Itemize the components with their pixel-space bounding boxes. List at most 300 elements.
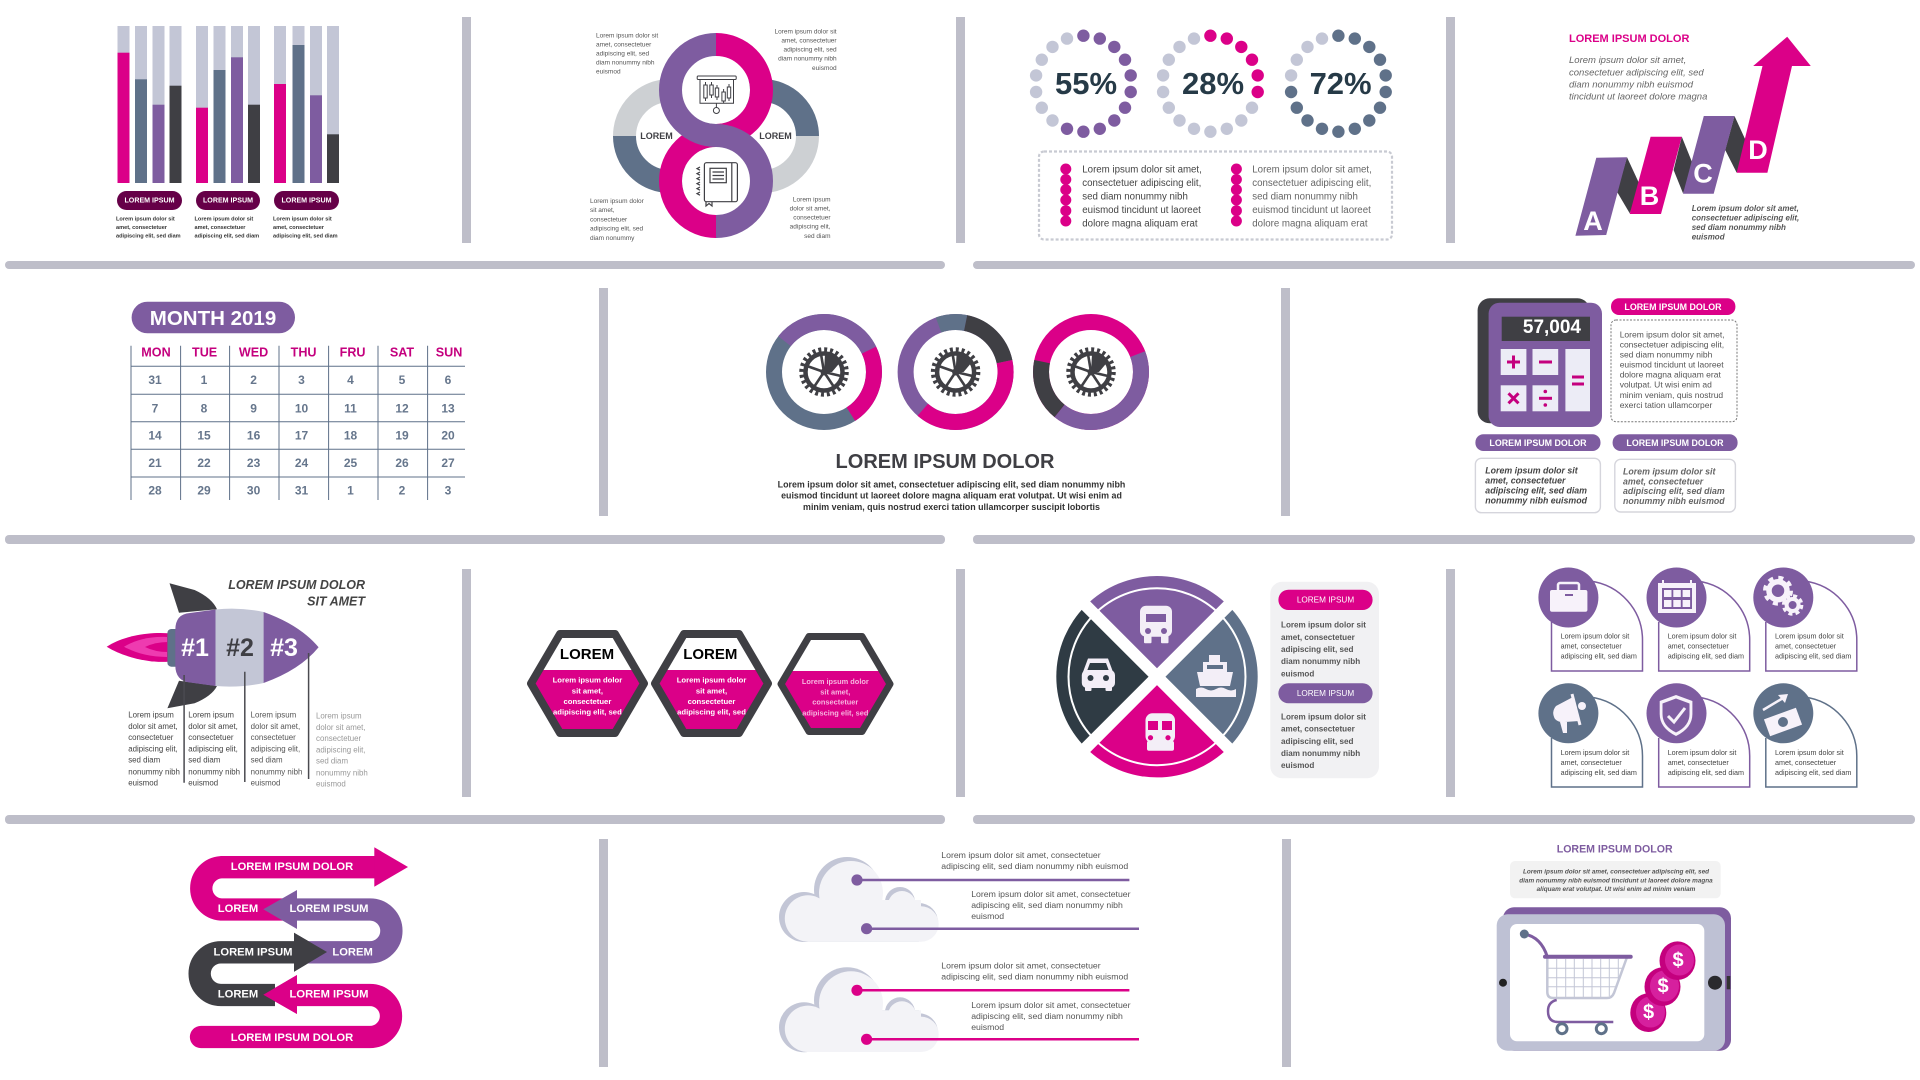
- column text 2: consectetuer: [188, 732, 234, 742]
- pointer 2: [861, 923, 1139, 934]
- column text 2: Lorem ipsum: [188, 710, 234, 719]
- label top: LOREM IPSUM DOLOR: [231, 861, 353, 873]
- arrow: dark: [200, 933, 327, 995]
- month pill: MONTH 2019: [150, 307, 276, 330]
- note box right: [1615, 459, 1735, 512]
- text column 2: Lorem ipsum dolor sit amet,: [1252, 164, 1372, 175]
- calendar dates: 25: [344, 456, 357, 470]
- weekday headers: MON: [141, 346, 171, 360]
- calendar dates: 12: [395, 402, 409, 416]
- rocket bottom fin: [167, 681, 217, 708]
- card megaphone: adipiscing elit, sed diam: [1561, 768, 1637, 776]
- label purple: LOREM IPSUM: [290, 903, 368, 915]
- body text: minim veniam, quis nostrud exerci tation ullamcorper suscipit lobortis: [803, 502, 1100, 512]
- icon: cloud 2: [779, 967, 939, 1052]
- text: bottom right: consectetuer: [793, 214, 831, 221]
- dashed text box: [1611, 320, 1737, 422]
- bar caption 2: Lorem ipsum dolor sit: [194, 217, 253, 223]
- pill heading magenta: LOREM IPSUM DOLOR: [1624, 302, 1722, 312]
- text: bottom left: Lorem ipsum dolor: [590, 198, 645, 204]
- bar caption 1: amet, consectetuer: [116, 225, 168, 231]
- note box right: amet, consectetuer: [1623, 476, 1704, 486]
- label short 2: LOREM: [332, 946, 373, 958]
- note box left: [1475, 458, 1600, 513]
- text: bottom right: adipiscing elit,: [790, 223, 831, 230]
- text block 4: adipiscing elit, sed diam nonummy nibh: [971, 1011, 1123, 1021]
- calendar dates: 4: [347, 373, 354, 387]
- panel: bar charts: [116, 26, 339, 239]
- card megaphone: [1538, 683, 1642, 787]
- legend pill 2: LOREM IPSUM: [1297, 689, 1354, 698]
- calendar dates: 13: [441, 402, 455, 416]
- legend text 1: diam nonummy nibh: [1281, 656, 1360, 666]
- legend text 2: diam nonummy nibh: [1281, 748, 1360, 758]
- calendar dates: 7: [152, 402, 159, 416]
- hexagon 3: Lorem ipsum dolor: [802, 676, 869, 686]
- column text 2: dolor sit amet,: [188, 722, 238, 730]
- panel: hexagons: [531, 634, 890, 733]
- rocket section 1: [175, 610, 216, 686]
- label dark: LOREM IPSUM: [214, 946, 292, 958]
- calendar dates: 16: [247, 429, 261, 443]
- card gears: adipiscing elit, sed diam: [1775, 651, 1851, 660]
- column text 2: nonummy nibh: [188, 767, 240, 776]
- letter C: C: [1693, 158, 1713, 188]
- hexagon 1: sit amet,: [572, 686, 603, 695]
- letter B: B: [1640, 181, 1659, 211]
- intro text: tincidunt ut laoreet dolore magna: [1569, 91, 1707, 102]
- bar label pill 3: [274, 191, 339, 210]
- column text 3: consectetuer: [251, 732, 296, 742]
- text: bottom left: adipiscing elit, sed: [590, 225, 643, 232]
- weekday headers: SUN: [436, 346, 462, 360]
- panel: dotted percentage rings: [1030, 29, 1392, 239]
- heading: LOREM IPSUM DOLOR: [228, 578, 365, 592]
- calendar dates: 2: [250, 373, 257, 387]
- label magenta: LOREM IPSUM: [290, 989, 368, 1001]
- calendar dates: 19: [395, 429, 409, 443]
- card calendar: [1646, 568, 1750, 671]
- bar label pill 2: [196, 191, 260, 210]
- card briefcase: [1538, 568, 1642, 671]
- dot ring 28 percent: [1157, 29, 1264, 138]
- hexagon 1: consectetuer: [563, 696, 611, 706]
- arrow: magenta top: [201, 847, 408, 910]
- note box left: Lorem ipsum dolor sit: [1485, 465, 1579, 475]
- icon: cloud 1: [779, 857, 939, 942]
- hexagon 3: adipiscing elit, sed: [802, 708, 869, 717]
- column text 1: nonummy nibh: [128, 767, 180, 776]
- calculator body: [1478, 298, 1602, 427]
- label #2: #2: [226, 634, 254, 662]
- pill heading magenta: [1611, 298, 1735, 315]
- icon: ship: [1196, 655, 1236, 697]
- calendar dates: 27: [441, 456, 455, 470]
- legend text 1: Lorem ipsum dolor sit: [1281, 620, 1366, 629]
- rocket flame: [107, 633, 168, 662]
- text column 1: sed diam nonummy nibh: [1082, 191, 1188, 202]
- column text 3: euismod: [251, 778, 280, 787]
- legend text 1: euismod: [1281, 669, 1314, 678]
- bar caption 3: adipiscing elit, sed diam: [273, 233, 338, 239]
- box text: dolore magna aliquam erat: [1620, 370, 1721, 380]
- heading: LOREM IPSUM DOLOR: [1569, 33, 1689, 45]
- calendar dates: 24: [295, 456, 308, 470]
- step D arrow: [1737, 37, 1811, 173]
- weekday headers: FRU: [340, 346, 366, 360]
- note box left: adipiscing elit, sed diam: [1485, 486, 1587, 496]
- calendar dates: 23: [247, 456, 261, 470]
- box text: volutpat. Ut wisi enim ad: [1620, 380, 1712, 390]
- card gears: Lorem ipsum dolor sit: [1775, 631, 1844, 640]
- panel: rising ribbon arrow: [1569, 33, 1811, 241]
- pointer 4: [861, 1034, 1139, 1045]
- arrow: magenta lower: [201, 975, 391, 1037]
- donut 2: [906, 322, 1006, 422]
- text column 2: dolore magna aliquam erat: [1252, 218, 1368, 229]
- bar chart group 1: [118, 26, 182, 183]
- bar caption 2: amet, consectetuer: [194, 225, 246, 231]
- text: bottom right: Lorem ipsum: [793, 196, 830, 203]
- dot ring 55 percent: [1030, 29, 1137, 138]
- legend text 2: Lorem ipsum dolor sit: [1281, 712, 1366, 721]
- card shield: adipiscing elit, sed diam: [1668, 768, 1744, 776]
- arrow: dark head overlay: [294, 933, 327, 972]
- column text 4: sed diam: [316, 756, 348, 765]
- calendar dates: 5: [399, 373, 406, 387]
- weekday headers: THU: [291, 346, 317, 360]
- label #3: #3: [270, 634, 298, 662]
- calendar dates: 3: [445, 483, 452, 497]
- step A: [1575, 157, 1627, 236]
- pie quadrant top: [1086, 576, 1228, 677]
- pie quadrant bottom: [1086, 677, 1228, 777]
- pie inner ring and gaps: [1068, 588, 1246, 765]
- card shield: [1646, 683, 1750, 787]
- card briefcase: amet, consectetuer: [1561, 641, 1622, 650]
- note box left: amet, consectetuer: [1485, 475, 1566, 485]
- column text 3: adipiscing elit,: [251, 744, 300, 753]
- bullet column 1: [1060, 164, 1071, 226]
- step B: [1630, 137, 1682, 214]
- box text: sed diam nonummy nibh: [1620, 349, 1713, 359]
- hexagon 3: [781, 636, 890, 732]
- hexagon 3: consectetuer: [812, 697, 858, 706]
- weekday headers: TUE: [192, 346, 217, 360]
- text: bottom left: sit amet,: [590, 206, 615, 214]
- calendar dates: 8: [201, 402, 208, 416]
- text: top right: adipiscing elit, sed: [783, 46, 837, 53]
- panel: rocket: [107, 578, 368, 788]
- text column 2: consectetuer adipiscing elit,: [1252, 178, 1371, 188]
- column text 3: Lorem ipsum: [251, 710, 297, 719]
- label #1: #1: [181, 634, 209, 662]
- icon: notebook: [697, 163, 737, 206]
- pill heading left: LOREM IPSUM DOLOR: [1489, 438, 1587, 448]
- column text 1: dolor sit amet,: [128, 722, 178, 730]
- step C: [1683, 116, 1734, 194]
- bar caption 1: adipiscing elit, sed diam: [116, 233, 181, 239]
- legend text 1: adipiscing elit, sed: [1281, 644, 1353, 654]
- calendar dates: 14: [148, 429, 162, 443]
- label: right ring: LOREM: [759, 131, 792, 141]
- bar chart group 2: [196, 26, 260, 183]
- hexagon 1: Lorem ipsum dolor: [553, 675, 622, 684]
- weekday headers: SAT: [390, 346, 414, 360]
- body text: Lorem ipsum dolor sit amet, consectetuer adipiscing elit, sed diam nonummy nibh: [778, 479, 1125, 489]
- text: top left: Lorem ipsum dolor sit: [596, 32, 658, 39]
- hexagon 2: LOREM: [683, 646, 737, 663]
- text column 1: Lorem ipsum dolor sit amet,: [1082, 164, 1202, 175]
- dot ring 72 percent: [1285, 29, 1392, 138]
- calculator display value: 57,004: [1523, 317, 1581, 338]
- card megaphone: amet, consectetuer: [1561, 758, 1622, 766]
- label bottom: LOREM IPSUM DOLOR: [231, 1032, 353, 1044]
- icon: coin 3: [1660, 941, 1696, 980]
- pill heading left: [1475, 434, 1600, 451]
- panel: clouds: [779, 850, 1139, 1052]
- label: left ring: LOREM: [640, 131, 673, 141]
- card gears: amet, consectetuer: [1775, 641, 1837, 650]
- intro text: Lorem ipsum dolor sit amet,: [1569, 54, 1686, 66]
- caption text: consectetuer adipiscing elit,: [1692, 213, 1799, 222]
- note box left: nonummy nibh euismod: [1485, 496, 1588, 506]
- rocket section 2: [216, 609, 264, 687]
- column text 4: dolor sit amet,: [316, 722, 366, 732]
- hexagon 2: [655, 634, 768, 733]
- calendar dates: 31: [295, 483, 308, 497]
- text: top left: adipiscing elit, sed: [596, 50, 649, 57]
- column text 1: Lorem ipsum: [128, 710, 174, 719]
- icon: car: [1082, 658, 1115, 691]
- pill heading right: LOREM IPSUM DOLOR: [1626, 438, 1724, 448]
- column text 2: adipiscing elit,: [188, 744, 238, 753]
- caption text: Lorem ipsum dolor sit amet,: [1692, 204, 1799, 212]
- bar label pill 2: LOREM IPSUM: [203, 196, 253, 204]
- column text 1: consectetuer: [128, 732, 174, 742]
- label short 1: LOREM: [218, 903, 258, 915]
- text block 1: adipiscing elit, sed diam nonummy nibh euismod: [941, 861, 1128, 871]
- text: top left: diam nonummy nibh: [596, 59, 655, 66]
- box text: Lorem ipsum dolor sit amet,: [1620, 329, 1725, 339]
- note box right: nonummy nibh euismod: [1623, 496, 1725, 506]
- legend pill 1: LOREM IPSUM: [1297, 596, 1354, 604]
- description box: Lorem ipsum dolor sit amet, consectetuer adipiscing elit, sed: [1523, 868, 1710, 875]
- text block 4: euismod: [971, 1022, 1004, 1032]
- heading: LOREM IPSUM DOLOR: [1557, 843, 1673, 855]
- value 72 percent: 72%: [1310, 66, 1372, 101]
- text block 2: euismod: [971, 911, 1004, 921]
- legend panel background: [1270, 582, 1379, 778]
- text: top right: euismod: [812, 64, 837, 72]
- card shield: amet, consectetuer: [1668, 758, 1729, 766]
- calculator keys: [1501, 349, 1590, 411]
- calendar dates: 28: [148, 483, 162, 497]
- legend text 2: amet, consectetuer: [1281, 724, 1356, 733]
- column text 2: sed diam: [188, 755, 221, 764]
- text column 1: dolore magna aliquam erat: [1082, 218, 1198, 229]
- text: bottom left: consectetuer: [590, 216, 628, 223]
- column text 3: sed diam: [251, 755, 283, 764]
- hexagon 1: [531, 634, 644, 733]
- rocket nozzle: [167, 629, 179, 667]
- card money: Lorem ipsum dolor sit: [1775, 748, 1844, 756]
- heading: SIT AMET: [307, 595, 366, 609]
- card shield: Lorem ipsum dolor sit: [1668, 748, 1736, 756]
- description box: diam nonummy nibh euismod tincidunt ut laoreet dolore magna: [1519, 877, 1713, 884]
- bar caption 2: adipiscing elit, sed diam: [194, 233, 259, 239]
- caption text: sed diam nonummy nibh: [1692, 222, 1786, 232]
- text block 1: Lorem ipsum dolor sit amet, consectetuer: [941, 850, 1101, 860]
- column text 4: Lorem ipsum: [316, 711, 362, 720]
- pie quadrant right: [1157, 606, 1258, 748]
- bar caption 3: Lorem ipsum dolor sit: [273, 217, 332, 223]
- calendar dates: 21: [148, 456, 162, 470]
- card calendar: Lorem ipsum dolor sit: [1668, 631, 1736, 640]
- column text 4: consectetuer: [316, 734, 362, 742]
- intro text: consectetuer adipiscing elit, sed: [1569, 67, 1704, 78]
- ribbon folds: [1617, 116, 1747, 213]
- text: bottom right: sed diam: [804, 232, 830, 240]
- hexagon 2: consectetuer: [688, 696, 735, 706]
- dashed text box: [1039, 152, 1392, 240]
- text: top right: amet, consectetuer: [781, 37, 837, 44]
- calendar grid: [131, 346, 465, 500]
- panel: interlocking rings: [590, 28, 837, 242]
- rocket top fin: [170, 583, 217, 613]
- calendar dates: 6: [445, 373, 452, 387]
- card money: amet, consectetuer: [1775, 758, 1837, 766]
- hexagon 2: adipiscing elit, sed: [677, 707, 746, 716]
- leader lines: [184, 653, 309, 783]
- card calendar: adipiscing elit, sed diam: [1668, 651, 1744, 660]
- value 28 percent: 28%: [1182, 66, 1244, 101]
- text column 1: consectetuer adipiscing elit,: [1082, 178, 1201, 188]
- bar label pill 3: LOREM IPSUM: [281, 196, 332, 204]
- bullet column 2: [1231, 164, 1242, 226]
- text: bottom left: diam nonummy: [590, 234, 635, 242]
- hexagon 2: Lorem ipsum dolor: [677, 675, 746, 684]
- icon: bus: [1140, 606, 1172, 643]
- rocket section 3: [264, 612, 319, 683]
- icon: shopping cart: [1520, 930, 1631, 1034]
- calendar dates: 1: [347, 483, 354, 497]
- weekday headers: WED: [239, 346, 268, 360]
- calendar dates: 18: [344, 429, 357, 443]
- icon: presentation board: [697, 76, 736, 114]
- box text: exerci tation ullamcorper: [1620, 400, 1712, 410]
- column text 4: euismod: [316, 779, 346, 788]
- box text: minim veniam, quis nostrud: [1620, 390, 1723, 400]
- hexagon 1: adipiscing elit, sed: [553, 707, 622, 716]
- pointer 3: [851, 985, 1129, 996]
- card calendar: amet, consectetuer: [1668, 641, 1729, 650]
- text column 2: euismod tincidunt ut laoreet: [1252, 204, 1371, 216]
- intro text: diam nonummy nibh euismod: [1569, 79, 1694, 90]
- caption text: euismod: [1692, 232, 1726, 241]
- hexagon 1: LOREM: [560, 646, 614, 663]
- calendar dates: 29: [197, 483, 211, 497]
- calendar dates: 15: [197, 429, 211, 443]
- letter A: A: [1583, 206, 1603, 236]
- icon: gear 1: [802, 350, 846, 394]
- note box right: adipiscing elit, sed diam: [1623, 486, 1725, 496]
- panel: serpentine arrows: [200, 847, 408, 1044]
- pointer 1: [851, 874, 1129, 886]
- icon: coin 2: [1644, 967, 1680, 1006]
- legend text 2: euismod: [1281, 760, 1314, 770]
- calendar dates: 30: [247, 483, 261, 497]
- icon: gear 2: [934, 350, 978, 394]
- text block 2: Lorem ipsum dolor sit amet, consectetuer: [971, 889, 1131, 899]
- legend pill 2: [1278, 683, 1373, 703]
- calendar dates: 22: [197, 456, 211, 470]
- box text: consectetuer adipiscing elit,: [1620, 339, 1724, 349]
- bar label pill 1: [117, 191, 182, 210]
- icon: train: [1146, 713, 1175, 751]
- icon: coin 3: $: [1672, 950, 1684, 972]
- text: bottom right: dolor sit amet,: [790, 205, 831, 212]
- card money: [1753, 683, 1857, 787]
- icon: coin 1: [1630, 993, 1666, 1032]
- body text: euismod tincidunt ut laoreet dolore magna aliquam erat volutpat. Ut wisi enim ad: [781, 491, 1122, 501]
- panel: gear donuts: [774, 322, 1141, 512]
- letter D: D: [1748, 135, 1768, 165]
- text column 1: euismod tincidunt ut laoreet: [1082, 204, 1201, 216]
- bar chart group 3: [274, 26, 339, 183]
- value 55 percent: 55%: [1055, 66, 1117, 101]
- text column 2: sed diam nonummy nibh: [1252, 191, 1358, 202]
- panel: tablet shopping: [1497, 843, 1731, 1051]
- calendar dates: 10: [295, 402, 308, 416]
- calendar dates: 2: [399, 483, 406, 497]
- label short 3: LOREM: [218, 989, 258, 1001]
- panel: calendar: [131, 302, 465, 500]
- panel: transport pie: [1056, 576, 1379, 778]
- panel: icon cards: [1538, 568, 1857, 787]
- legend text 1: amet, consectetuer: [1281, 632, 1356, 642]
- legend pill 1: [1278, 590, 1373, 610]
- text block 3: adipiscing elit, sed diam nonummy nibh euismod: [941, 971, 1128, 981]
- text: top left: euismod: [596, 68, 621, 75]
- description box: aliquam erat volutpat. Ut wisi enim ad minim veniam: [1537, 886, 1696, 892]
- card gears: [1753, 568, 1857, 671]
- arrow: purple: [263, 890, 391, 952]
- donut 1: [774, 322, 874, 422]
- calendar dates: 26: [395, 456, 409, 470]
- hexagon 2: sit amet,: [696, 686, 727, 695]
- calendar dates: 1: [201, 373, 208, 387]
- column text 2: euismod: [188, 778, 218, 787]
- column text 4: nonummy nibh: [316, 768, 368, 777]
- card briefcase: adipiscing elit, sed diam: [1561, 651, 1637, 660]
- legend text 2: adipiscing elit, sed: [1281, 736, 1353, 746]
- bar caption 1: Lorem ipsum dolor sit: [116, 217, 175, 223]
- card megaphone: Lorem ipsum dolor sit: [1561, 748, 1629, 756]
- icon: coin 2: $: [1657, 976, 1669, 998]
- column text 1: euismod: [128, 778, 158, 787]
- pie quadrant left: [1056, 606, 1157, 748]
- hexagon 3: sit amet,: [820, 687, 850, 696]
- panel: calculator: [1475, 298, 1738, 513]
- calendar dates: 20: [441, 429, 455, 443]
- icon: gear 3: [1069, 350, 1113, 394]
- column text 1: sed diam: [128, 755, 161, 764]
- calendar dates: 3: [298, 373, 305, 387]
- calendar dates: 17: [295, 429, 308, 443]
- text: top right: diam nonummy nibh: [778, 55, 837, 62]
- card money: adipiscing elit, sed diam: [1775, 768, 1851, 776]
